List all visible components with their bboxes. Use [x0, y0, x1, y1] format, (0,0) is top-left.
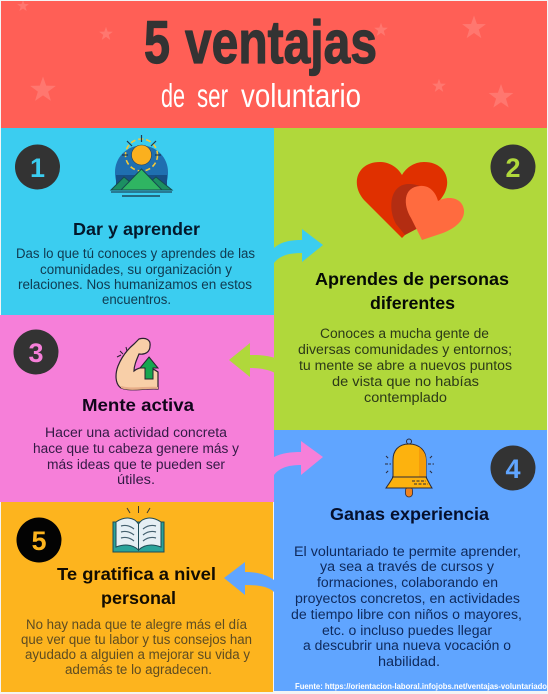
- title: 5: [144, 9, 170, 76]
- text: body 5: además te lo agradecen.: [65, 662, 212, 677]
- heading: Te gratifica a nivel personal: personal: [101, 588, 176, 608]
- text: body 5: No hay nada que te alegre más el día: [26, 617, 247, 632]
- panel 5 content: [16, 506, 252, 677]
- heading: Te gratifica a nivel personal: [57, 564, 216, 608]
- panel 3 content: [14, 330, 239, 487]
- text: body 4: habilidad.: [378, 654, 440, 669]
- text: body 2: tu mente se abre a nuevos puntos: [299, 358, 512, 373]
- arrow: blue, panel 4 to 5: [224, 562, 274, 595]
- text: body 4: formaciones, colaborando en: [317, 575, 498, 590]
- text: body 4: etc. o incluso puedes llegar: [322, 623, 493, 638]
- text: body 4: [291, 544, 522, 669]
- text: body 3: [33, 425, 239, 487]
- text: body 4: a descubrir una nueva vocación o: [303, 638, 511, 653]
- number badge 2: 2: [505, 153, 521, 183]
- heading: Ganas experiencia: Ganas experiencia: [330, 504, 489, 524]
- heading: Aprendes de personas diferentes: Aprendes de personas: [315, 269, 509, 289]
- text: body 2: Conoces a mucha gente de: [320, 326, 489, 341]
- panel 4 content: [291, 439, 547, 691]
- heading: Mente activa: Mente activa: [82, 395, 194, 415]
- number badge 5: [16, 518, 62, 562]
- text: body 1: Das lo que tú conoces y aprendes de las: [16, 246, 255, 261]
- heading: Dar y aprender: Dar y aprender: [73, 219, 200, 239]
- panel 1 content: [15, 135, 255, 307]
- number badge 5: 5: [31, 526, 47, 556]
- text: body 2: de vista que no habías: [332, 374, 479, 389]
- text: body 3: hace que tu cabeza genere más y: [33, 441, 239, 456]
- subtitle: [161, 77, 361, 114]
- title: ventajas: [185, 9, 377, 76]
- subtitle: de: [161, 77, 185, 114]
- arrow: pink, panel 3 to 4: [274, 441, 323, 475]
- title: [144, 9, 377, 76]
- icon: bell: [385, 439, 434, 497]
- text: body 2: diversas comunidades y entornos;: [298, 342, 512, 357]
- icon: sun over mountains: [111, 135, 172, 196]
- text: body 2: [298, 326, 512, 405]
- text: body 4: proyectos concretos, en actividades: [295, 591, 520, 606]
- text: body 3: Hacer una actividad concreta: [45, 425, 227, 440]
- panel: header: [1, 0, 547, 128]
- heading: Aprendes de personas diferentes: diferentes: [370, 293, 455, 313]
- panel: 1 dar y aprender background: [1, 128, 274, 315]
- subtitle: voluntario: [241, 77, 361, 114]
- panel 2 content: [298, 144, 536, 405]
- text: body 4: ya sea a través de cursos y: [320, 559, 494, 574]
- text: body 1: encuentros.: [102, 292, 171, 307]
- text: body 4: El voluntariado te permite aprender,: [294, 544, 521, 559]
- arrow: green, panel 2 to 3: [229, 343, 275, 377]
- panel: 2 aprendes de personas diferentes background: [274, 128, 547, 430]
- number badge 1: 1: [30, 153, 45, 183]
- subtitle: ser: [197, 77, 228, 114]
- arrow: blue, panel 1 to 2: [274, 229, 323, 263]
- text: body 2: contemplado: [364, 390, 447, 405]
- text: body 1: relaciones. Nos humanizamos en estos: [18, 277, 252, 292]
- number badge 2: [490, 144, 536, 190]
- number badge 4: [490, 446, 536, 490]
- number badge 3: [14, 330, 58, 374]
- panel: 5 te gratifica background: [1, 502, 273, 692]
- text: body 5: ayudado a alguien a mejorar su vida y: [25, 647, 250, 662]
- text: body 4: de tiempo libre con niños o mayores,: [291, 607, 522, 622]
- heading: Aprendes de personas diferentes: [315, 269, 509, 313]
- panel: 3 mente activa background: [0, 315, 274, 502]
- number badge 3: 3: [28, 338, 44, 368]
- heading: Te gratifica a nivel personal: Te gratifica a nivel: [57, 564, 216, 584]
- number badge 4: 4: [505, 454, 521, 484]
- panel: 4 ganas experiencia background: [274, 430, 547, 691]
- text: body 3: más ideas que te pueden ser: [47, 457, 226, 472]
- text: body 5: que ver que tu labor y tus consejos han: [21, 632, 252, 647]
- icon: open book: [113, 506, 164, 552]
- text: body 3: útiles.: [117, 472, 155, 487]
- icon: flexed arm: [116, 338, 158, 390]
- text: body 5: [21, 617, 252, 677]
- text: body 1: [16, 246, 255, 307]
- icon: hearts: [357, 162, 464, 240]
- number badge 1: [15, 144, 60, 190]
- text: body 1: comunidades, su organización y: [40, 262, 232, 277]
